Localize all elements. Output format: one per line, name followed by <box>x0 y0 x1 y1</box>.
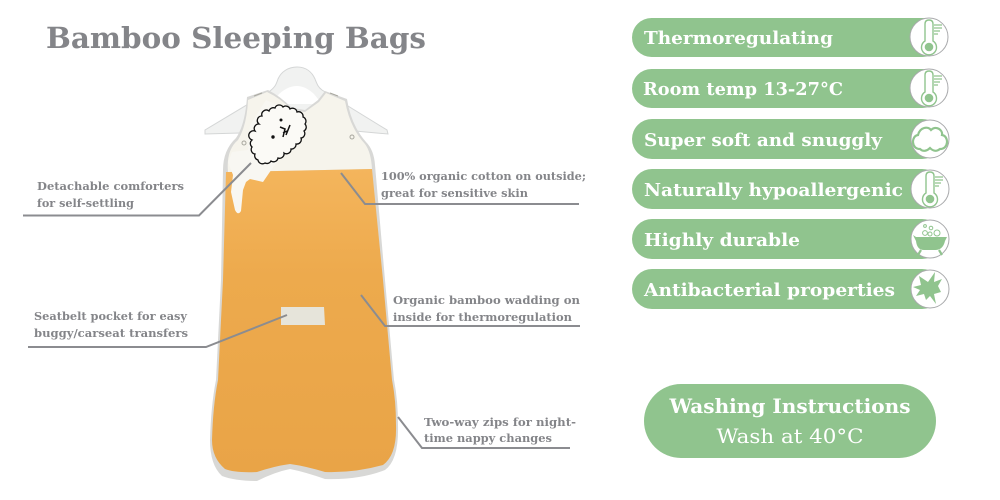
feature: thermoregulating: Thermoregulating <box>644 28 833 49</box>
icon: bathtub <box>911 220 949 258</box>
icon: bacteria splat <box>911 270 949 308</box>
feature: hypoallergenic <box>632 169 949 209</box>
callout: seatbelt pocket <box>28 310 287 347</box>
callout: comforters: for self-settling <box>37 197 134 210</box>
feature: antibacterial <box>632 269 949 309</box>
callout: seatbelt pocket: buggy/carseat transfers <box>34 327 188 340</box>
callout: bamboo wadding <box>361 294 580 326</box>
icon: thermometer <box>910 18 948 56</box>
feature: super soft <box>632 119 949 159</box>
hanger <box>205 67 388 134</box>
feature: super soft: Super soft and snuggly <box>644 130 883 151</box>
callout: two-way zips <box>398 416 576 448</box>
icon: cloud <box>911 120 949 158</box>
illustration: sleeping bag on hanger <box>205 67 398 481</box>
feature: hypoallergenic: Naturally hypoallergenic <box>644 180 903 201</box>
seatbelt pocket <box>281 307 325 325</box>
callout: two-way zips: time nappy changes <box>424 432 552 445</box>
callout: bamboo wadding: Organic bamboo wadding on <box>393 294 580 307</box>
feature: highly durable: Highly durable <box>644 230 800 251</box>
icon: thermometer <box>911 170 949 208</box>
callout: organic cotton: great for sensitive skin <box>381 187 528 200</box>
washing instructions badge: Washing Instructions <box>668 394 910 418</box>
callout: bamboo wadding: inside for thermoregulation <box>393 311 572 324</box>
washing instructions badge: Wash at 40°C <box>716 424 864 448</box>
shoulder snaps <box>242 93 354 145</box>
cotton yoke <box>228 92 372 172</box>
orange body <box>212 169 396 472</box>
icon: thermometer <box>910 69 948 107</box>
feature: highly durable <box>632 219 949 259</box>
callout: comforters <box>23 163 251 216</box>
callout: two-way zips: Two-way zips for night- <box>424 416 576 429</box>
washing instructions badge <box>644 384 936 458</box>
feature: room temp: Room temp 13-27°C <box>643 79 843 100</box>
feature: room temp <box>632 69 948 108</box>
comforter <box>228 100 306 213</box>
feature: antibacterial: Antibacterial properties <box>643 280 895 301</box>
feature: thermoregulating <box>632 18 948 57</box>
bag edge <box>210 90 398 481</box>
callout: comforters: Detachable comforters <box>37 180 184 193</box>
callout: seatbelt pocket: Seatbelt pocket for easy <box>34 310 188 323</box>
callout: organic cotton: 100% organic cotton on outside; <box>381 170 586 183</box>
title: Bamboo Sleeping Bags <box>46 21 426 55</box>
callout: organic cotton <box>341 170 586 204</box>
